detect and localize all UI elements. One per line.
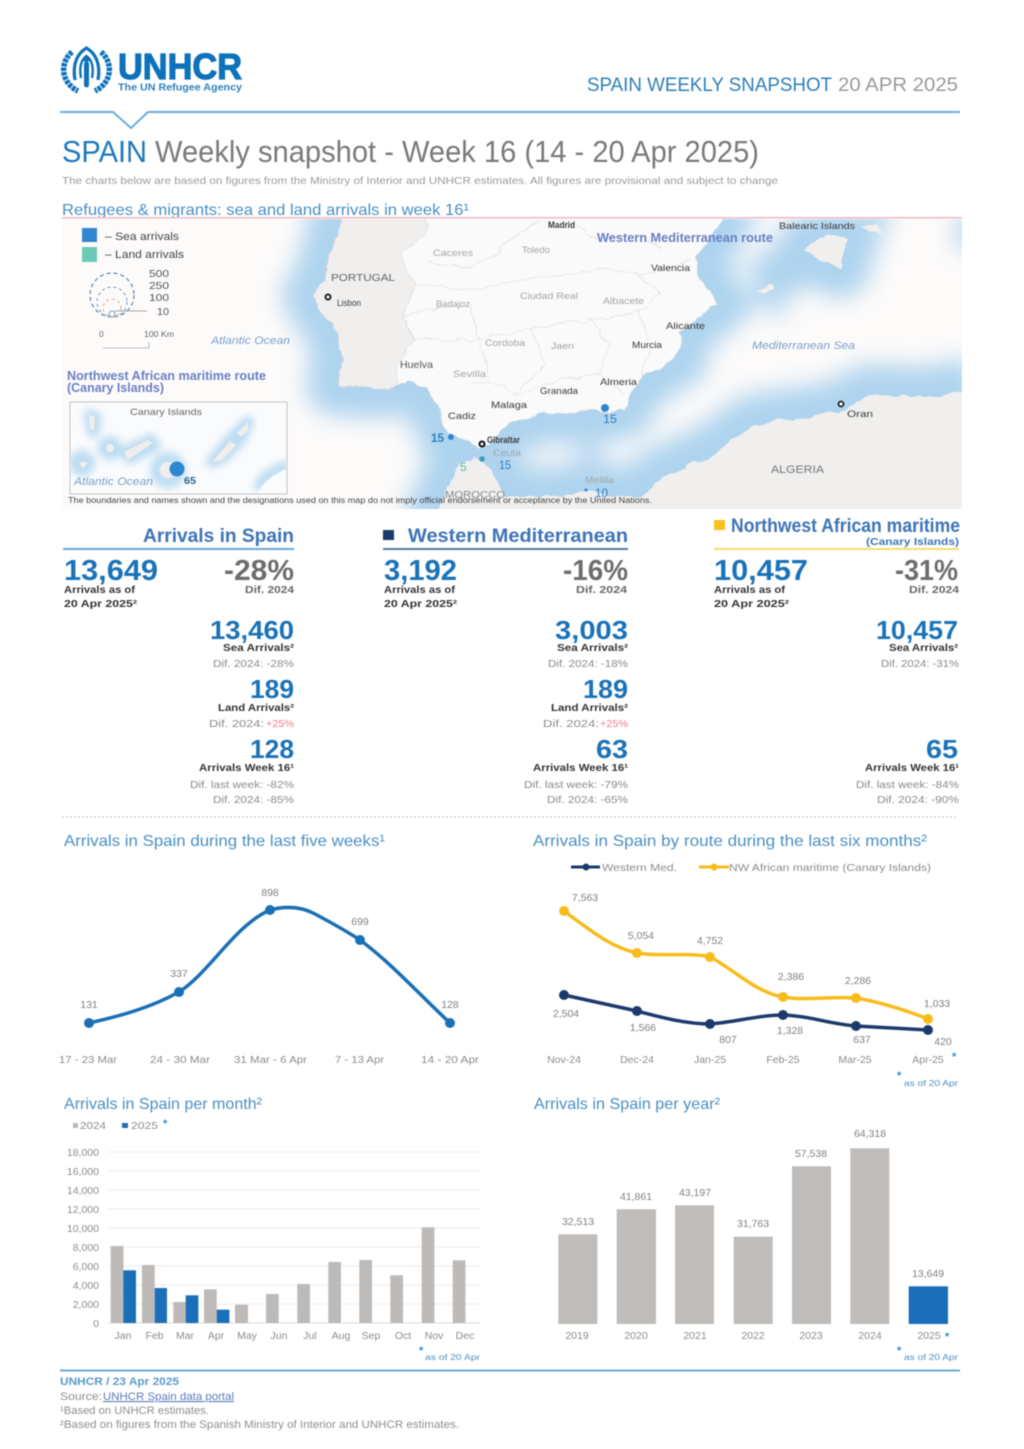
- weekly arrivals: [856, 734, 960, 806]
- land arrivals: Land Arrivals²: [551, 702, 629, 714]
- weekly arrivals: Dif. 2024: -65%: [547, 794, 628, 806]
- bars: [558, 1148, 948, 1324]
- marker: 65 arrivals: 65: [184, 475, 196, 487]
- legend: scale bar: 100 Km: [144, 329, 174, 339]
- heading: Arrivals in Spain per year²: [534, 1096, 721, 1113]
- x axis labels: Sep: [362, 1330, 380, 1342]
- x axis labels: 2024: [858, 1330, 882, 1342]
- data labels: 31,763: [737, 1218, 769, 1230]
- note: as of 20 Apr: as of 20 Apr: [904, 1078, 958, 1088]
- place labels: Almeria: [600, 377, 638, 388]
- sea arrivals: Dif. 2024: -18%: [548, 658, 628, 670]
- percentage difference: -31%: [895, 555, 958, 587]
- place labels: Atlantic Ocean: [210, 335, 290, 347]
- land arrivals: Land Arrivals²: [218, 702, 295, 714]
- place labels: Badajoz: [436, 299, 470, 310]
- y axis labels: 8,000: [73, 1242, 99, 1254]
- data labels: 131: [80, 999, 98, 1011]
- note: as of 20 Apr: [897, 1070, 958, 1088]
- x axis labels: Feb: [146, 1330, 164, 1342]
- y axis labels: 18,000: [67, 1147, 99, 1159]
- legend: scale bar: 0: [99, 329, 104, 339]
- arrival markers: 5: [460, 460, 467, 474]
- axis labels: 31 Mar - 6 Apr: [234, 1054, 308, 1066]
- inset map: Canary Islands: [70, 402, 290, 495]
- logo: UNHCR: [64, 46, 242, 94]
- place labels: Mediterranean Sea: [752, 340, 855, 352]
- sea arrivals: Sea Arrivals²: [889, 642, 959, 654]
- data labels: 4,752: [697, 935, 723, 947]
- data labels: 5,054: [628, 930, 654, 942]
- panel: Northwest African maritime: [714, 516, 960, 806]
- axis labels: [547, 1054, 944, 1066]
- x axis labels: 2022: [741, 1330, 765, 1342]
- heading: Arrivals in Spain per month²: [64, 1096, 263, 1113]
- logo tagline: The UN Refugee Agency: [118, 82, 242, 94]
- chart: arrivals per month: [64, 1096, 480, 1362]
- logo wordmark: UNHCR: [118, 46, 242, 87]
- data labels: [80, 887, 459, 1011]
- axis labels: Jan-25: [694, 1054, 726, 1066]
- footer: source: UNHCR Spain data portal: [103, 1391, 234, 1403]
- land arrivals: +25%: [600, 718, 628, 730]
- weekly arrivals: Dif. 2024: -90%: [877, 794, 959, 806]
- place labels: Sevilla: [453, 369, 487, 380]
- legend: NW African maritime (Canary Islands): [729, 862, 931, 874]
- sea arrivals: 10,457: [876, 615, 958, 645]
- axis labels: 17 - 23 Mar: [59, 1054, 118, 1066]
- weekly arrivals: Dif. 2024: -85%: [213, 794, 294, 806]
- place labels: PORTUGAL: [331, 272, 395, 284]
- x axis labels: Oct: [395, 1330, 411, 1342]
- header rule with chevron: [60, 112, 960, 128]
- weekly arrivals: Arrivals Week 16¹: [865, 762, 960, 774]
- y axis labels: 4,000: [73, 1280, 99, 1292]
- data labels: 128: [441, 999, 459, 1011]
- title: SPAIN: [62, 134, 147, 169]
- heading: Western Mediterranean: [408, 526, 628, 547]
- inset map: Canary Islands: Atlantic Ocean: [73, 476, 153, 488]
- data labels: 1,328: [777, 1025, 803, 1037]
- legend: Western Med.: [602, 862, 677, 874]
- chart: five weeks line: [59, 833, 480, 1066]
- heading: (Canary Islands): [866, 536, 959, 548]
- route label: Northwest African: Northwest African maritime route: [67, 369, 266, 383]
- legend: [571, 862, 931, 874]
- sea arrivals: Sea Arrivals²: [223, 642, 295, 654]
- total arrivals: [64, 555, 158, 610]
- data labels: 2,504: [553, 1008, 579, 1020]
- x axis labels: [115, 1330, 474, 1342]
- x axis labels: Dec: [456, 1330, 474, 1342]
- x axis labels: 2020: [624, 1330, 648, 1342]
- sea arrivals: [210, 615, 295, 670]
- arrival markers: 15: [603, 412, 617, 426]
- data labels: 807: [719, 1034, 737, 1046]
- x axis labels: Mar: [176, 1330, 195, 1342]
- place labels: Jaen: [551, 341, 574, 352]
- data labels: 43,197: [679, 1187, 711, 1199]
- icon: UNHCR emblem: [64, 48, 109, 91]
- total arrivals: Arrivals as of: [384, 584, 456, 596]
- axis labels: Mar-25: [838, 1054, 872, 1066]
- x axis labels: Jan: [115, 1330, 132, 1342]
- x axis labels: Jun: [271, 1330, 288, 1342]
- legend: proportional circles: 500: [149, 268, 169, 280]
- weekly arrivals: Arrivals Week 16¹: [199, 762, 295, 774]
- axis labels: [59, 1054, 480, 1066]
- footer: organisation and date: UNHCR / 23 Apr 2025: [60, 1376, 179, 1388]
- place labels: Malaga: [491, 400, 528, 411]
- arrival markers: 10: [595, 486, 608, 500]
- heading: Arrivals in Spain during the last five weeks¹: [64, 833, 385, 850]
- place labels: Caceres: [433, 248, 473, 259]
- legend: scale bar: [99, 329, 174, 348]
- percentage difference: Dif. 2024: [245, 584, 294, 596]
- place labels: Toledo: [522, 245, 550, 256]
- total arrivals: 20 Apr 2025²: [64, 598, 138, 610]
- y axis labels: [67, 1147, 99, 1330]
- y axis labels: 10,000: [67, 1223, 99, 1235]
- land: Balearic Islands: [758, 225, 883, 296]
- weekly arrivals: Dif. last week: -84%: [856, 779, 959, 791]
- note: as of 20 Apr: *: [897, 1070, 902, 1082]
- percentage difference: Dif. 2024: [576, 584, 627, 596]
- land arrivals: Dif. 2024:: [209, 718, 264, 730]
- sea arrivals: [548, 615, 629, 670]
- place labels: Ciudad Real: [520, 291, 578, 302]
- total arrivals: 3,192: [384, 555, 457, 587]
- legend: proportional circles: 250: [149, 280, 169, 292]
- weekly arrivals: Dif. last week: -82%: [190, 779, 294, 791]
- place labels: Murcia: [632, 340, 663, 351]
- total arrivals: 13,649: [64, 555, 158, 587]
- sea arrivals: 13,460: [210, 615, 294, 645]
- data labels: 637: [853, 1034, 871, 1046]
- data labels: 32,513: [562, 1216, 594, 1228]
- place labels: Gibraltar: [487, 435, 520, 446]
- land: Iberia: [396, 218, 724, 449]
- chart: arrivals per year: *: [945, 1331, 950, 1343]
- province borders: [403, 220, 690, 395]
- route label: Northwest African: [67, 369, 266, 395]
- note: as of 20 Apr: as of 20 Apr: [904, 1352, 958, 1362]
- heading: [714, 516, 960, 548]
- legend: land arrivals: – Land arrivals: [105, 249, 185, 261]
- weekly arrivals: Arrivals Week 16¹: [533, 762, 629, 774]
- x axis labels: [565, 1330, 941, 1342]
- data labels: [562, 1128, 944, 1280]
- heading: Northwest African maritime: [731, 516, 960, 537]
- land arrivals: +25%: [266, 718, 294, 730]
- chart: arrivals per year: [534, 1096, 958, 1362]
- axis labels: Dec-24: [620, 1054, 654, 1066]
- legend: 2025: [131, 1120, 158, 1132]
- total arrivals: 20 Apr 2025²: [384, 598, 458, 610]
- total arrivals: Arrivals as of: [64, 584, 136, 596]
- marker: 65 arrivals: [170, 462, 196, 487]
- panel: map: [66, 218, 962, 510]
- axis labels: 14 - 20 Apr: [421, 1054, 480, 1066]
- arrival markers: 15: [431, 431, 444, 445]
- x axis labels: Jul: [303, 1330, 317, 1342]
- footnote 2: ²Based on figures from the Spanish Ministry of Interior and UNHCR estimates.: [60, 1419, 459, 1431]
- x axis labels: May: [237, 1330, 258, 1342]
- bars 2025: [123, 1270, 229, 1323]
- sea arrivals: Dif. 2024: -28%: [213, 658, 294, 670]
- arrival markers: 15: [499, 458, 511, 472]
- axis labels: Apr-25: [912, 1054, 944, 1066]
- place labels: Ceuta: [493, 448, 522, 459]
- legend: proportional circles: 100: [149, 292, 169, 304]
- weekly arrivals: 65: [926, 734, 958, 764]
- map legend: [82, 228, 185, 348]
- bars 2024: [111, 1227, 465, 1323]
- y axis labels: 0: [93, 1318, 99, 1330]
- note: as of 20 Apr: *: [897, 1345, 902, 1357]
- place labels: Granada: [540, 386, 579, 397]
- axis labels: 24 - 30 Mar: [150, 1054, 211, 1066]
- data labels: 64,318: [854, 1128, 886, 1140]
- data labels: 699: [351, 916, 369, 928]
- data labels: 13,649: [912, 1268, 944, 1280]
- place labels: Valencia: [651, 263, 691, 274]
- footer: [60, 1376, 459, 1431]
- percentage difference: Dif. 2024: [909, 584, 959, 596]
- x axis labels: Apr: [208, 1330, 225, 1342]
- place labels: ALGERIA: [771, 464, 825, 476]
- route label: Northwest African: (Canary Islands): [67, 381, 164, 395]
- x axis labels: 2019: [565, 1330, 589, 1342]
- data labels: [553, 892, 952, 1048]
- heading: Arrivals in Spain: [143, 526, 294, 547]
- land: North Africa: [438, 391, 962, 510]
- place labels: Oran: [847, 409, 873, 420]
- data labels: 1,566: [630, 1022, 656, 1034]
- note: as of 20 Apr: [419, 1345, 480, 1362]
- axis labels: Nov-24: [547, 1054, 581, 1066]
- sea arrivals: Dif. 2024: -31%: [881, 658, 959, 670]
- place labels: Balearic Islands: [779, 221, 855, 232]
- place labels: Melilla: [585, 475, 615, 486]
- data labels: 1,033: [924, 998, 950, 1010]
- total arrivals: [384, 555, 458, 610]
- weekly arrivals: Dif. last week: -79%: [524, 779, 628, 791]
- header label: SPAIN WEEKLY SNAPSHOT: [587, 75, 832, 96]
- percentage difference: -28%: [224, 555, 294, 587]
- legend: proportional circles: [90, 268, 169, 318]
- place labels: Huelva: [400, 359, 433, 371]
- place labels: Cordoba: [485, 338, 526, 349]
- data labels: 41,861: [620, 1191, 652, 1203]
- legend: *: [163, 1118, 168, 1130]
- y axis labels: 14,000: [67, 1185, 99, 1197]
- percentage difference: -16%: [563, 555, 628, 587]
- weekly arrivals: [524, 734, 629, 806]
- place labels: Albacete: [603, 296, 644, 307]
- total arrivals: [714, 555, 808, 610]
- data labels: 898: [261, 887, 279, 899]
- panel: Arrivals in Spain: [63, 526, 295, 806]
- footnote 1: ¹Based on UNHCR estimates.: [60, 1405, 209, 1417]
- legend: [73, 1118, 168, 1132]
- weekly arrivals: 63: [596, 734, 628, 764]
- land: Portugal: [314, 219, 429, 390]
- data labels: 420: [934, 1036, 952, 1048]
- panel: Western Mediterranean: [383, 526, 629, 806]
- place labels: Alicante: [666, 321, 705, 332]
- weekly arrivals: [190, 734, 295, 806]
- map rule: [62, 217, 962, 218]
- land arrivals: [209, 674, 295, 730]
- heading: map section: Refugees & migrants: sea and land arrivals in week 16¹: [62, 202, 469, 219]
- data labels: 57,538: [795, 1148, 827, 1160]
- y axis labels: 12,000: [67, 1204, 99, 1216]
- line: NW African maritime: [559, 906, 933, 1024]
- route label: Western Mediterranean: Western Mediterranean route: [597, 231, 773, 245]
- data labels: 7,563: [572, 892, 598, 904]
- header label: 20 APR 2025: [838, 75, 958, 96]
- footer: source: Source:: [60, 1391, 102, 1403]
- x axis labels: Nov: [425, 1330, 444, 1342]
- header label: [587, 75, 958, 96]
- map disclaimer: The boundaries and names shown and the designations used on this map do not imply official endorsement or acceptance by the United Nations.: [68, 496, 652, 505]
- y axis labels: 2,000: [73, 1299, 99, 1311]
- place labels: MOROCCO: [445, 490, 505, 501]
- total arrivals: 10,457: [714, 555, 808, 587]
- total arrivals: 20 Apr 2025²: [714, 598, 790, 610]
- land arrivals: 189: [250, 674, 294, 704]
- weekly arrivals: 128: [250, 734, 294, 764]
- land arrivals: [543, 674, 629, 730]
- x axis labels: Aug: [332, 1330, 350, 1342]
- heading: Arrivals in Spain by route during the last six months²: [533, 833, 928, 850]
- place labels: Lisbon: [337, 298, 361, 309]
- data labels: 2,386: [778, 971, 804, 983]
- y axis labels: 6,000: [73, 1261, 99, 1273]
- x axis labels: 2021: [683, 1330, 707, 1342]
- place labels: Cadiz: [448, 411, 476, 422]
- chart: route line: *: [952, 1051, 957, 1063]
- y axis labels: 16,000: [67, 1166, 99, 1178]
- data labels: 2,286: [845, 975, 871, 987]
- note: as of 20 Apr: as of 20 Apr: [425, 1352, 480, 1362]
- chart: route line: [533, 833, 958, 1088]
- legend: 2024: [80, 1120, 106, 1132]
- title: Weekly snapshot - Week 16 (14 - 20 Apr 2025): [155, 134, 759, 169]
- line series: [84, 905, 455, 1028]
- axis labels: Feb-25: [766, 1054, 800, 1066]
- note: as of 20 Apr: [897, 1345, 958, 1362]
- data labels: 337: [170, 968, 188, 980]
- sea arrivals: 3,003: [555, 615, 628, 645]
- sea arrivals: Sea Arrivals²: [557, 642, 629, 654]
- arrival markers: [431, 404, 617, 500]
- sea arrivals: [876, 615, 959, 670]
- line: Western Med: [559, 990, 933, 1035]
- legend: proportional circles: 10: [157, 306, 169, 318]
- land arrivals: 189: [583, 674, 628, 704]
- map base: [210, 218, 962, 510]
- inset map: Canary Islands: Canary Islands: [130, 407, 202, 418]
- legend: sea arrivals: – Sea arrivals: [105, 231, 180, 243]
- total arrivals: Arrivals as of: [714, 584, 786, 596]
- land arrivals: Dif. 2024:: [543, 718, 599, 730]
- place labels: Madrid: [548, 220, 575, 231]
- place labels: [210, 220, 873, 501]
- subtitle: The charts below are based on figures from the Ministry of Interior and UNHCR estimates. All figures are provisional and subject to change: [62, 175, 778, 187]
- axis labels: 7 - 13 Apr: [335, 1054, 385, 1066]
- note: as of 20 Apr: *: [419, 1345, 424, 1357]
- x axis labels: 2025: [917, 1330, 941, 1342]
- x axis labels: 2023: [799, 1330, 823, 1342]
